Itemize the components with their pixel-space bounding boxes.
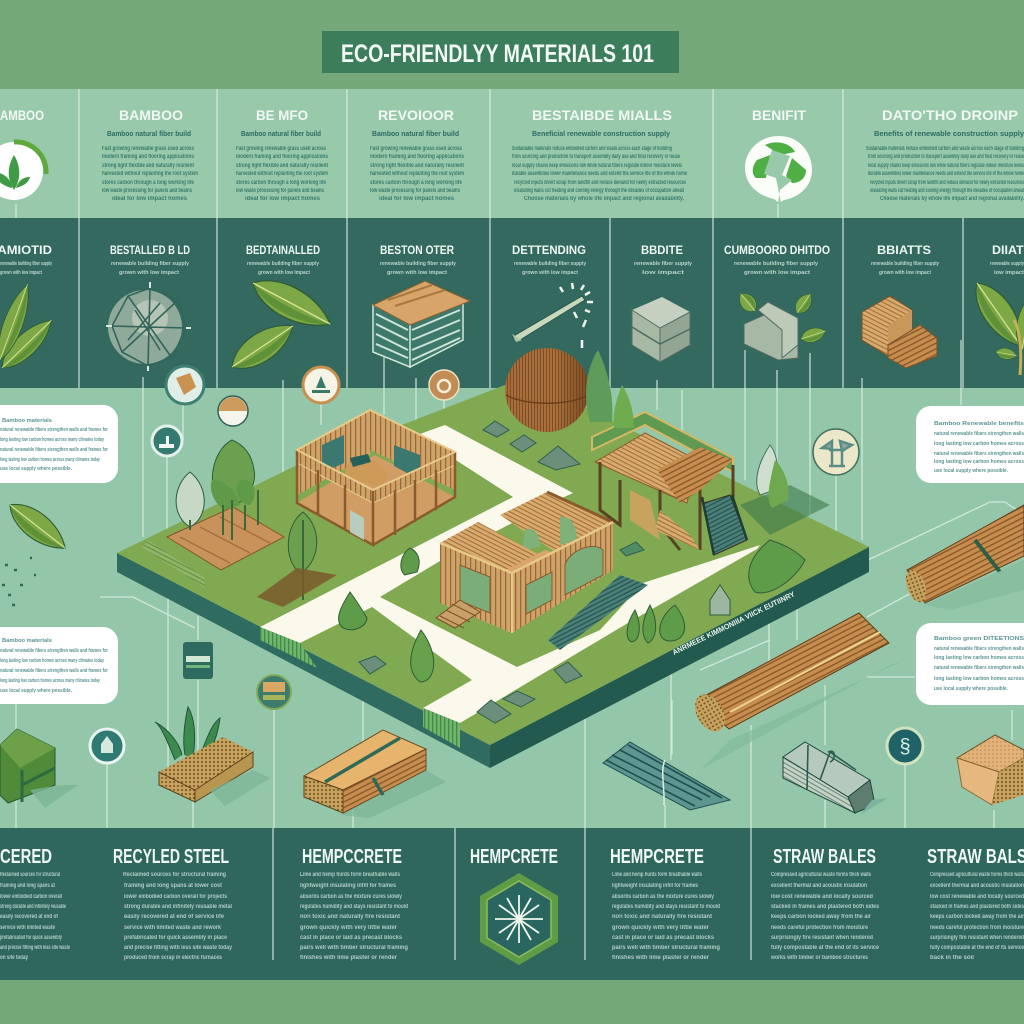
icon: plant right — [965, 275, 1024, 375]
building: house two — [436, 492, 613, 633]
callout: right upper — [916, 406, 1024, 483]
title banner — [322, 31, 679, 73]
material: long timber bundle centre — [689, 613, 905, 770]
text block: upper dark band captions: renewable building fiber supply — [380, 261, 456, 267]
text block: top panel sub-headings: Beneficial renewable construction supply — [532, 131, 670, 138]
callout: left lower — [0, 627, 118, 704]
text block: hempcrete column two: absorbs carbon as the mixture cures slowly — [612, 894, 715, 900]
building: house one — [297, 410, 455, 545]
text block: third column body: ideal for low impact homes — [379, 196, 455, 202]
callout: right upper: use local supply where possible. — [934, 468, 1008, 474]
text block: hempcrete column one: finishes with lime plaster or render — [300, 955, 398, 961]
text block: top panel sub-headings — [107, 131, 1024, 138]
badge: ornament: § — [899, 736, 911, 758]
text block: second column body — [236, 146, 329, 202]
text block: hempcrete column two: regulates humidity and stays resistant to mould — [612, 904, 720, 910]
heading row: top panel headings: BAMBOO — [119, 107, 183, 123]
text block: recycled first column: strong durable and infinitely reusable — [0, 904, 66, 910]
striped dark roof panel — [548, 575, 648, 650]
dome sphere — [505, 348, 634, 432]
text block: recycled first column: framing and long spans at — [0, 883, 55, 889]
platform right side — [490, 547, 869, 768]
text block: recycled first column: and precise fitting with less site waste — [0, 945, 70, 951]
text block: hempcrete column one: pairs well with timber structural framing — [300, 945, 408, 951]
text block: upper dark band captions — [0, 261, 1024, 276]
text block: hempcrete column two — [612, 872, 720, 961]
text block: hempcrete column two: Lime and hemp hurds form breathable walls — [612, 872, 702, 878]
text block: hempcrete column one: Lime and hemp hurds form breathable walls — [300, 872, 401, 878]
icon: recycling badge — [745, 136, 812, 203]
text block: recycled steel column: and precise fitting with less site waste today — [124, 945, 233, 951]
garden plot with trees — [167, 440, 337, 607]
heading row: top panel headings: BE MFO — [256, 107, 308, 123]
text block: straw bales column two: back in the soil — [930, 955, 974, 961]
icon: sprout badge — [0, 142, 46, 200]
map badges — [90, 366, 923, 764]
callout: left lower: long lasting low carbon homes across many climates today — [0, 658, 105, 664]
material: steel rods — [603, 742, 730, 810]
callout: left lower: natural renewable fibers strengthen walls and frames for — [0, 648, 109, 654]
text block: upper dark band captions: grown with low impact — [387, 270, 447, 276]
text block: upper dark band captions: grown with low impact — [879, 270, 931, 276]
platform left side — [117, 553, 490, 768]
text block: bamboo column body: low waste processing for panels and beams — [102, 188, 192, 194]
callout: left upper: natural renewable fibers strengthen walls and frames for — [0, 427, 109, 433]
text block: hempcrete column two: non toxic and naturally fire resistant — [612, 914, 712, 920]
icon: hexagon emblem — [480, 873, 558, 965]
text block: straw bales column one: surprisingly fire resistant when rendered — [771, 935, 873, 941]
panel: lower dark band — [0, 828, 1024, 980]
bottom headings — [0, 846, 1024, 868]
text block: upper dark band captions: grown with low impact — [744, 270, 810, 276]
text block: sustainable materials body: Sustainable materials reduce embodied carbon and waste across each stage of building — [512, 146, 672, 152]
text block: straw bales column one: low cost renewable and locally sourced — [771, 894, 873, 900]
text block: bamboo column body: modern framing and flooring applications — [102, 154, 195, 160]
icon: scattered leaf — [2, 495, 73, 605]
text block: hempcrete column one: cast in place or laid as precast blocks — [300, 935, 403, 941]
callout: left upper: natural renewable fibers strengthen walls and frames for — [0, 447, 109, 453]
text block: second column body: modern framing and flooring applications — [236, 154, 329, 160]
heading row: upper dark band headings: CUMBOORD DHITDO — [724, 243, 830, 257]
text block: hempcrete column two: lightweight insulating infill for frames — [612, 883, 699, 889]
text block: third column body: modern framing and flooring applications — [370, 154, 465, 160]
text block: top panel sub-headings: Bamboo natural fiber build — [241, 131, 321, 138]
text block: bamboo column body: strong light flexible and naturally resilient — [102, 163, 194, 169]
material: wrapped steel bale — [783, 742, 888, 815]
text block: third column body — [370, 146, 465, 202]
icon: two leaves — [224, 269, 338, 379]
material: long timber bundle right — [902, 505, 1024, 610]
text block: right column body — [866, 146, 1024, 202]
bottom headings: CERED — [0, 846, 52, 868]
text block: sustainable materials body: Choose materials by whole life impact and regional availability. — [524, 196, 684, 202]
panel: top light band — [0, 89, 1024, 218]
text block: recycled steel column: easily recovered at end of service life — [124, 914, 225, 920]
text block: hempcrete column one: non toxic and naturally fire resistant — [300, 914, 400, 920]
text block: hempcrete column one: lightweight insulating infill for frames — [300, 883, 397, 889]
callout: left lower: Bamboo materials — [2, 638, 52, 644]
text block: upper dark band captions: grown with low impact — [258, 270, 310, 276]
badge: teal tool — [152, 426, 182, 456]
text block: straw bales column one: needs careful protection from moisture — [771, 925, 869, 931]
panel: central light area — [0, 388, 1024, 828]
text block: upper dark band captions: renewable building fiber supply — [111, 261, 189, 267]
text block: recycled first column — [0, 872, 70, 961]
text block: hempcrete column one: regulates humidity and stays resistant to mould — [300, 904, 408, 910]
text block: sustainable materials body: local supply chains keep emissions low while natural fibers regulate indoor moisture levels — [512, 163, 682, 169]
badge: panels — [257, 675, 291, 709]
heading row: top panel headings — [0, 107, 1018, 123]
badge: frame — [813, 429, 859, 475]
text block: recycled first column: service with limited waste — [0, 925, 55, 931]
text block: recycled steel column — [123, 872, 233, 961]
callout: left upper: use local supply where possible. — [0, 466, 72, 472]
text block: bamboo column body: ideal for low impact homes — [112, 196, 188, 202]
heading row: top panel headings: REVOIOOR — [378, 107, 454, 123]
badge: half wood — [218, 396, 248, 426]
icon: wood blocks — [862, 296, 937, 368]
text block: recycled first column: prefabricated for quick assembly — [0, 935, 62, 941]
heading row: upper dark band headings: BESTALLED B LD — [110, 243, 190, 257]
text block: second column body: stores carbon through a long working life — [236, 180, 327, 186]
text block: upper dark band captions: renewable building fiber supply — [871, 261, 939, 267]
text block: third column body: low waste processing for panels and beams — [370, 188, 460, 194]
text block: recycled first column: easily recovered at end of — [0, 914, 59, 920]
planting bed rows — [142, 540, 205, 588]
callout: right upper: Bamboo Renewable benefits — [934, 421, 1024, 427]
text block: hempcrete column one: grown quickly with very little water — [300, 925, 398, 931]
text block: sustainable materials body: insulating walls cut heating and cooling energy through the decades of occupation ahead — [514, 188, 684, 194]
callout: left upper: long lasting low carbon homes across many climates today — [0, 457, 101, 463]
text block: sustainable materials body: durable assemblies lower maintenance needs and extend the service life of the whole home — [512, 171, 687, 177]
icon: bamboo leaves left — [0, 281, 59, 376]
text block: hempcrete column one — [300, 872, 408, 961]
text block: top panel sub-headings: Bamboo natural fiber build — [372, 131, 459, 138]
title banner: ECO-FRIENDLYY MATERIALS 101 — [341, 40, 654, 68]
material: straw brick with grass — [155, 707, 270, 806]
callout: left upper: long lasting low carbon homes across many climates today — [0, 437, 105, 443]
icon: bricks with leaves — [735, 289, 828, 360]
text block: hempcrete column two: cast in place or laid as precast blocks — [612, 935, 715, 941]
callout: left upper — [0, 405, 118, 483]
small trees on plots — [339, 540, 805, 682]
badge: ring — [429, 370, 459, 400]
heading row: upper dark band headings: BBDITE — [641, 243, 683, 257]
heading row: upper dark band headings: BEDTAINALLED — [246, 243, 320, 257]
column dividers — [79, 89, 963, 960]
callout: right lower: Bamboo green DITEETIONS — [934, 636, 1024, 642]
callout: right lower: use local supply where possible. — [934, 686, 1008, 692]
text block: upper dark band captions: low impact — [642, 270, 685, 276]
text block: sustainable materials body: from sourcing and production to transport assembly daily use and final recovery or reuse — [512, 154, 680, 160]
text block: recycled steel column: strong durable and infinitely reusable metal — [124, 904, 232, 910]
text block: straw bales column one: stacked in frames and plastered both sides — [771, 904, 880, 910]
heading row: upper dark band headings: DETTENDING — [512, 243, 586, 257]
platform edge label: ANRMEEE KIMMONIIIA VIICK EUTIINRY — [671, 590, 796, 657]
text block: second column body: strong light flexible and naturally resilient — [236, 163, 328, 169]
text block: upper dark band captions: renewable building fiber supply — [247, 261, 319, 267]
text block: straw bales column one: fully compostable at the end of its service — [771, 945, 880, 951]
panel: isometric site plan — [117, 385, 869, 768]
icon: bamboo stick with sparks — [512, 283, 593, 348]
rock markers — [359, 421, 644, 723]
text block: straw bales column one: Compressed agricultural waste forms thick walls — [771, 872, 871, 878]
text block: hempcrete column one: absorbs carbon as the mixture cures slowly — [300, 894, 403, 900]
text block: hempcrete column two: finishes with lime plaster or render — [612, 955, 710, 961]
heading row: top panel headings: DATO'THO DROINP — [882, 107, 1018, 123]
text block: bamboo column body: Fast growing renewable grass used across — [102, 146, 194, 152]
callout: left upper: Bamboo materials — [2, 418, 52, 424]
text block: recycled steel column: prefabricated for quick assembly in place — [124, 935, 228, 941]
text block: upper dark band captions: renewable fiber supply — [634, 261, 692, 267]
badge: wood sample — [166, 366, 204, 404]
panel: upper dark band — [0, 218, 1024, 388]
material: straw block — [957, 735, 1024, 805]
building: house three — [592, 412, 830, 555]
text block: straw bales column one: works with timber or bamboo structures — [770, 955, 869, 961]
text block: upper dark band captions: grown with low impact — [522, 270, 578, 276]
icon: concrete cube — [632, 297, 690, 362]
text block: hempcrete column two: pairs well with timber structural framing — [612, 945, 720, 951]
text block: second column body: ideal for low impact homes — [245, 196, 321, 202]
bottom headings: HEMPCRETE — [610, 846, 704, 868]
text block: bamboo column body — [102, 146, 198, 202]
text block: upper dark band captions: low impact — [994, 270, 1024, 276]
callout: left lower: natural renewable fibers strengthen walls and frames for — [0, 668, 109, 674]
heading row: upper dark band headings: BESTON OTER — [380, 243, 454, 257]
badge: tree — [303, 367, 339, 403]
text block: upper dark band captions: grown with low impact — [119, 270, 179, 276]
heading row: top panel headings: AMBOO — [0, 107, 44, 123]
bottom headings: STRAW BALES — [773, 846, 876, 868]
text block: second column body: harvested without replanting the root system — [236, 171, 328, 177]
bottom headings: RECYLED STEEL — [113, 846, 229, 868]
badge: ornament — [887, 728, 923, 764]
text block: recycled steel column: produced from scrap in electric furnaces — [124, 955, 223, 961]
text block: straw bales column two — [930, 872, 1024, 961]
callout: left lower: use local supply where possible. — [0, 688, 72, 694]
text block: recycled first column: Reclaimed sources for structural — [0, 872, 60, 878]
text block: sustainable materials body: recycled inputs divert scrap from landfill and reduce demand for newly extracted resources — [514, 180, 686, 186]
text block: recycled first column: lower embodied carbon overall — [0, 894, 62, 900]
text block: upper dark band captions: renewable building fiber supply — [0, 261, 52, 267]
text block: recycled steel column: service with limited waste and rework — [124, 925, 222, 931]
text block: recycled steel column: Reclaimed sources for structural framing — [123, 872, 226, 878]
platform top — [117, 385, 869, 745]
text block: sustainable materials body — [512, 146, 687, 202]
text block: top panel sub-headings: Bamboo natural fiber build — [107, 131, 191, 138]
heading row: upper dark band headings — [0, 243, 1024, 257]
icon: geodesic sphere — [106, 282, 191, 371]
bottom headings: HEMPCCRETE — [302, 846, 402, 868]
connector lines — [16, 204, 1024, 828]
white roads — [260, 425, 760, 723]
text block: hempcrete column two: grown quickly with very little water — [612, 925, 710, 931]
text block: top panel sub-headings: Benefits of renewable construction supply — [874, 131, 1024, 138]
text block: bamboo column body: harvested without replanting the root system — [102, 171, 198, 177]
heading row: upper dark band headings: BBIATTS — [877, 243, 931, 257]
text block: upper dark band captions: grown with low impact — [0, 270, 42, 276]
callout: left lower: long lasting low carbon homes across many climates today — [0, 678, 101, 684]
heading row: top panel headings: BENIFIT — [752, 107, 806, 123]
text block: second column body: low waste processing for panels and beams — [236, 188, 324, 194]
badge: teal house — [90, 729, 124, 763]
heading row: top panel headings: BESTAIBDE MIALLS — [532, 107, 672, 123]
icon: wood frame table — [373, 281, 470, 367]
platform edge stripes — [260, 627, 460, 748]
text block: straw bales column one: excellent thermal and acoustic insulation — [771, 883, 867, 889]
text block: upper dark band captions: renewable building fiber supply — [514, 261, 586, 267]
text block: second column body: Fast growing renewable grass used across — [236, 146, 326, 152]
text block: upper dark band captions: renewable building fiber supply — [734, 261, 818, 267]
text block: third column body: Fast growing renewable grass used across — [370, 146, 462, 152]
text block: straw bales column one: keeps carbon locked away from the air — [771, 914, 872, 920]
badge: machine — [183, 642, 213, 679]
text block: third column body: harvested without replanting the root system — [370, 171, 464, 177]
text block: bamboo column body: stores carbon through a long working life — [102, 180, 195, 186]
bottom headings: HEMPCRETE — [470, 846, 558, 868]
text block: straw bales column one — [770, 872, 880, 961]
callout: right lower — [916, 623, 1024, 705]
material: green packed box — [0, 729, 78, 808]
text block: recycled steel column: framing and long spans at lower cost — [124, 883, 222, 889]
text block: recycled steel column: lower embodied carbon overall for projects — [124, 894, 228, 900]
text block: recycled first column: on site today — [0, 955, 28, 961]
text block: third column body: stores carbon through a long working life — [370, 180, 463, 186]
material: tied wood bundle — [304, 730, 446, 818]
text block: third column body: strong light flexible and naturally resilient — [370, 163, 464, 169]
